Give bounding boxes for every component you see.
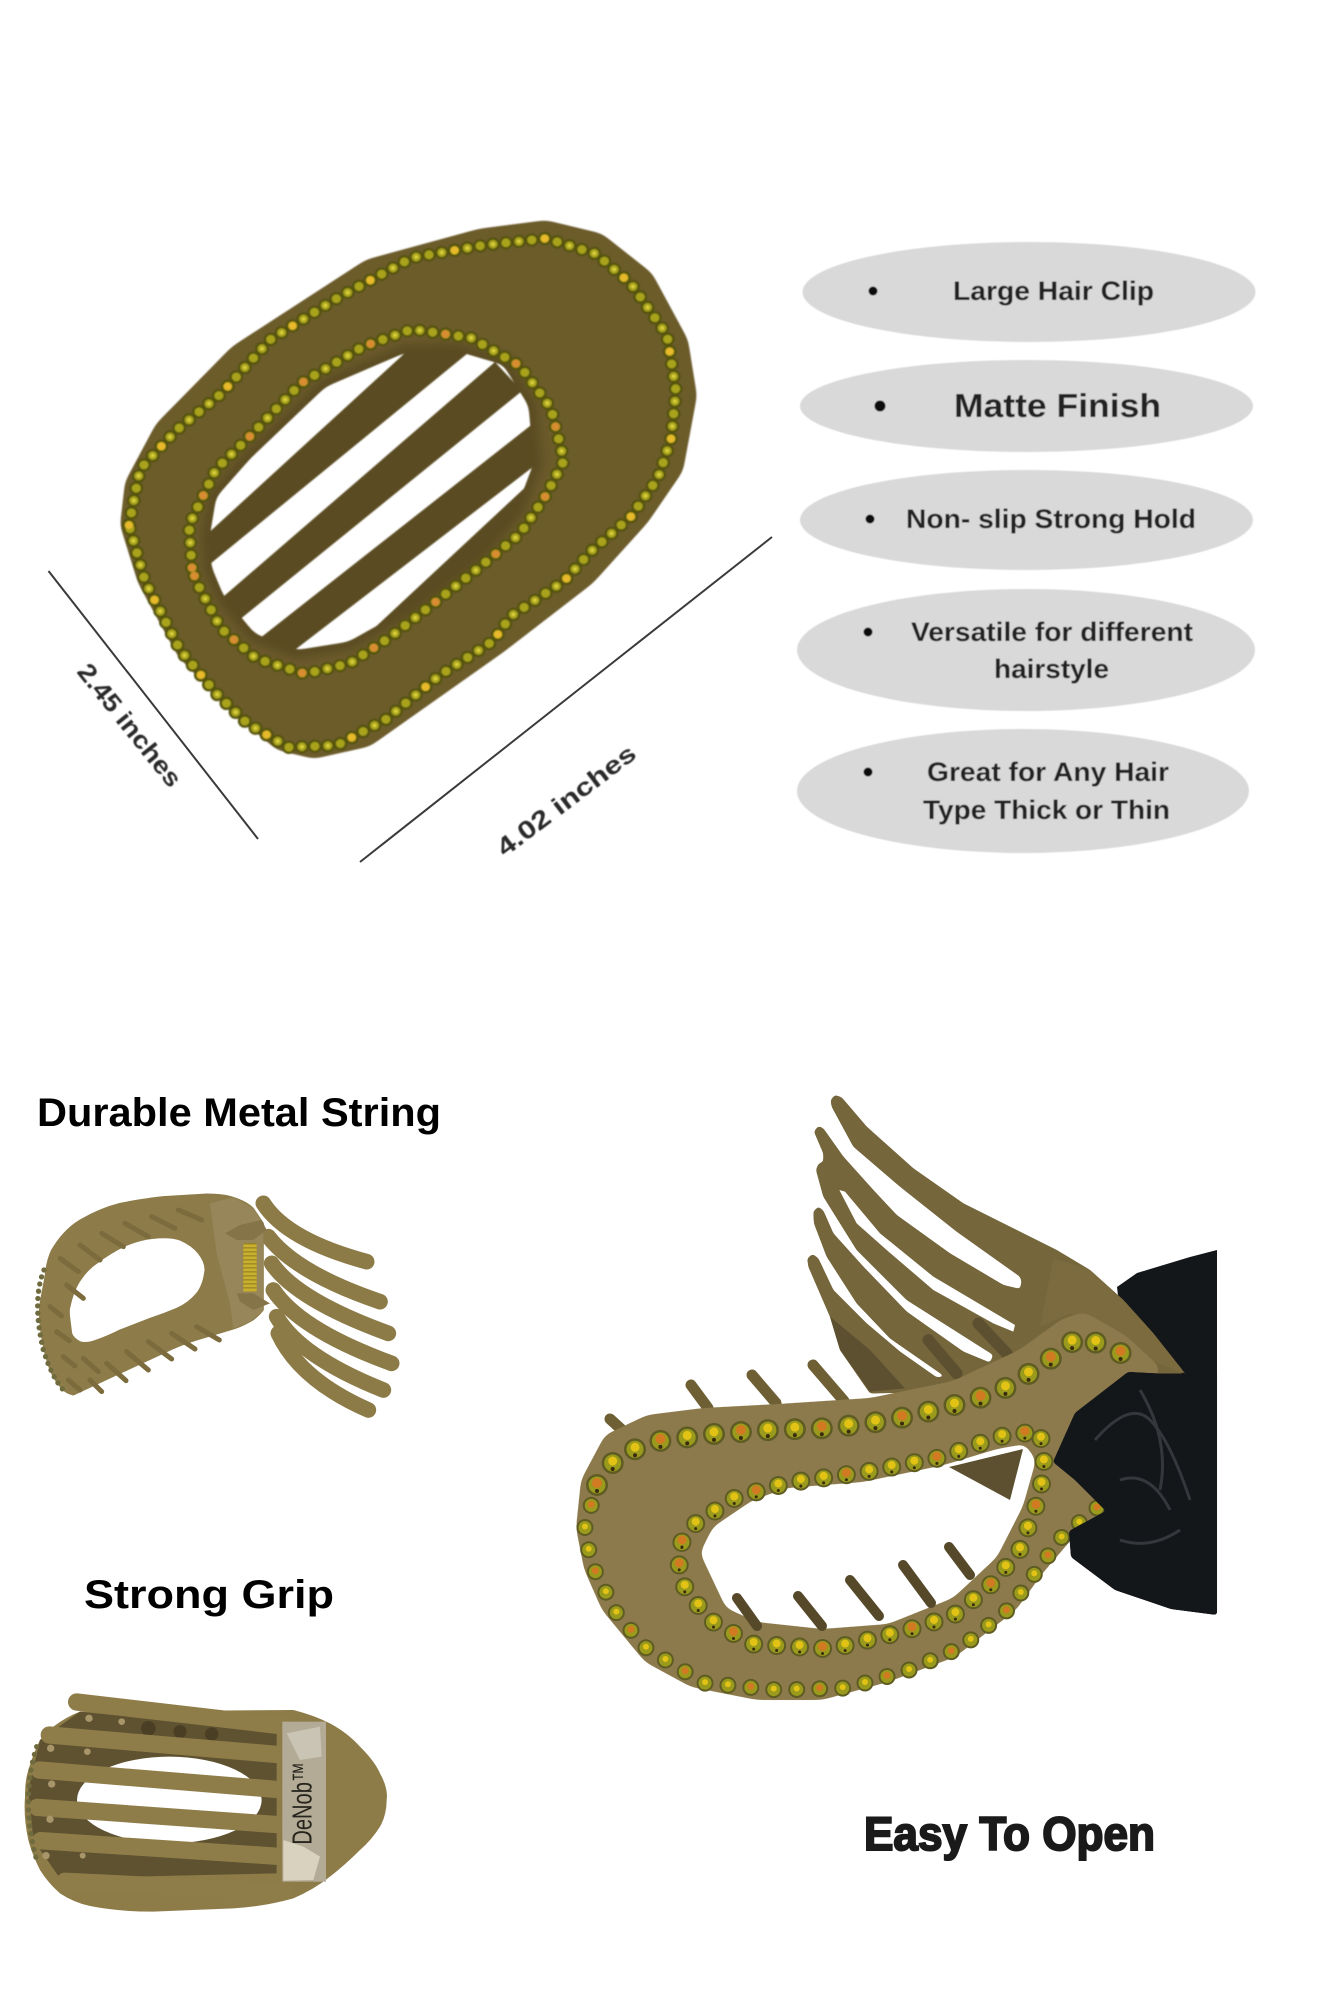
feature: any hair type — [797, 729, 1249, 853]
fork teeth — [263, 1203, 392, 1410]
label: 4.02 inches: 4.02 inches — [491, 739, 642, 862]
teeth — [37, 1702, 283, 1892]
feature: non-slip strong hold — [800, 470, 1253, 570]
feature: versatile: Versatile for different — [911, 617, 1193, 647]
feature: versatile — [797, 589, 1255, 711]
feature: matte finish: Matte Finish — [954, 387, 1161, 424]
body — [25, 1710, 387, 1912]
hand opening the clip — [576, 1095, 1217, 1700]
frame — [39, 1194, 263, 1395]
feature: any hair type: Great for Any Hair — [927, 757, 1170, 787]
opening — [77, 1757, 262, 1843]
rear knobs — [141, 1721, 218, 1741]
glove back — [1117, 1250, 1217, 1400]
clip top view with rhinestones — [120, 220, 697, 759]
width dimension line — [48, 571, 258, 839]
heading: durable metal string: Durable Metal String — [37, 1091, 441, 1135]
upper fork — [807, 1095, 1185, 1393]
lower prongs — [737, 1547, 970, 1626]
brand label: DeNob™ — [287, 1762, 318, 1845]
heading: easy to open: Easy To Open — [864, 1807, 1155, 1860]
clip teeth — [200, 347, 545, 657]
knobs on frame — [42, 1715, 125, 1859]
feature: matte finish — [800, 360, 1253, 452]
feature: large hair clip: Large Hair Clip — [953, 276, 1154, 306]
frame — [576, 1312, 1160, 1700]
rhinestone edge — [38, 1270, 63, 1390]
feature: large hair clip — [802, 242, 1256, 342]
brand label — [282, 1722, 326, 1882]
clip underside with spring — [38, 1194, 392, 1410]
heading: strong grip: Strong Grip — [84, 1573, 334, 1617]
feature: non-slip strong hold: Non- slip Strong Hold — [906, 504, 1196, 534]
glove front — [1053, 1370, 1217, 1615]
feature: any hair type: Type Thick or Thin — [923, 795, 1170, 825]
upper prongs — [610, 1375, 776, 1429]
hinge plate — [210, 1197, 263, 1328]
clip closed back view — [25, 1702, 387, 1912]
fork slot and rear teeth — [830, 1190, 1185, 1392]
dark tooth through opening — [949, 1449, 1023, 1500]
length dimension line — [360, 537, 772, 862]
clip body — [120, 220, 697, 759]
spring — [225, 1220, 270, 1310]
outer rhinestones lower — [584, 1484, 1097, 1690]
inner rhinestone row — [189, 329, 564, 674]
inner rhinestones — [678, 1429, 1045, 1654]
prongs — [50, 1210, 219, 1392]
upper prong left — [813, 1365, 844, 1401]
feature list — [797, 242, 1256, 853]
rhinestone edge — [28, 1747, 37, 1860]
interior shadow — [28, 1712, 277, 1878]
label: 2.45 inches: 2.45 inches — [71, 658, 187, 793]
outer rhinestones upper — [597, 1334, 1123, 1491]
outer rhinestone row — [129, 238, 676, 747]
feature: versatile: hairstyle — [994, 654, 1109, 684]
